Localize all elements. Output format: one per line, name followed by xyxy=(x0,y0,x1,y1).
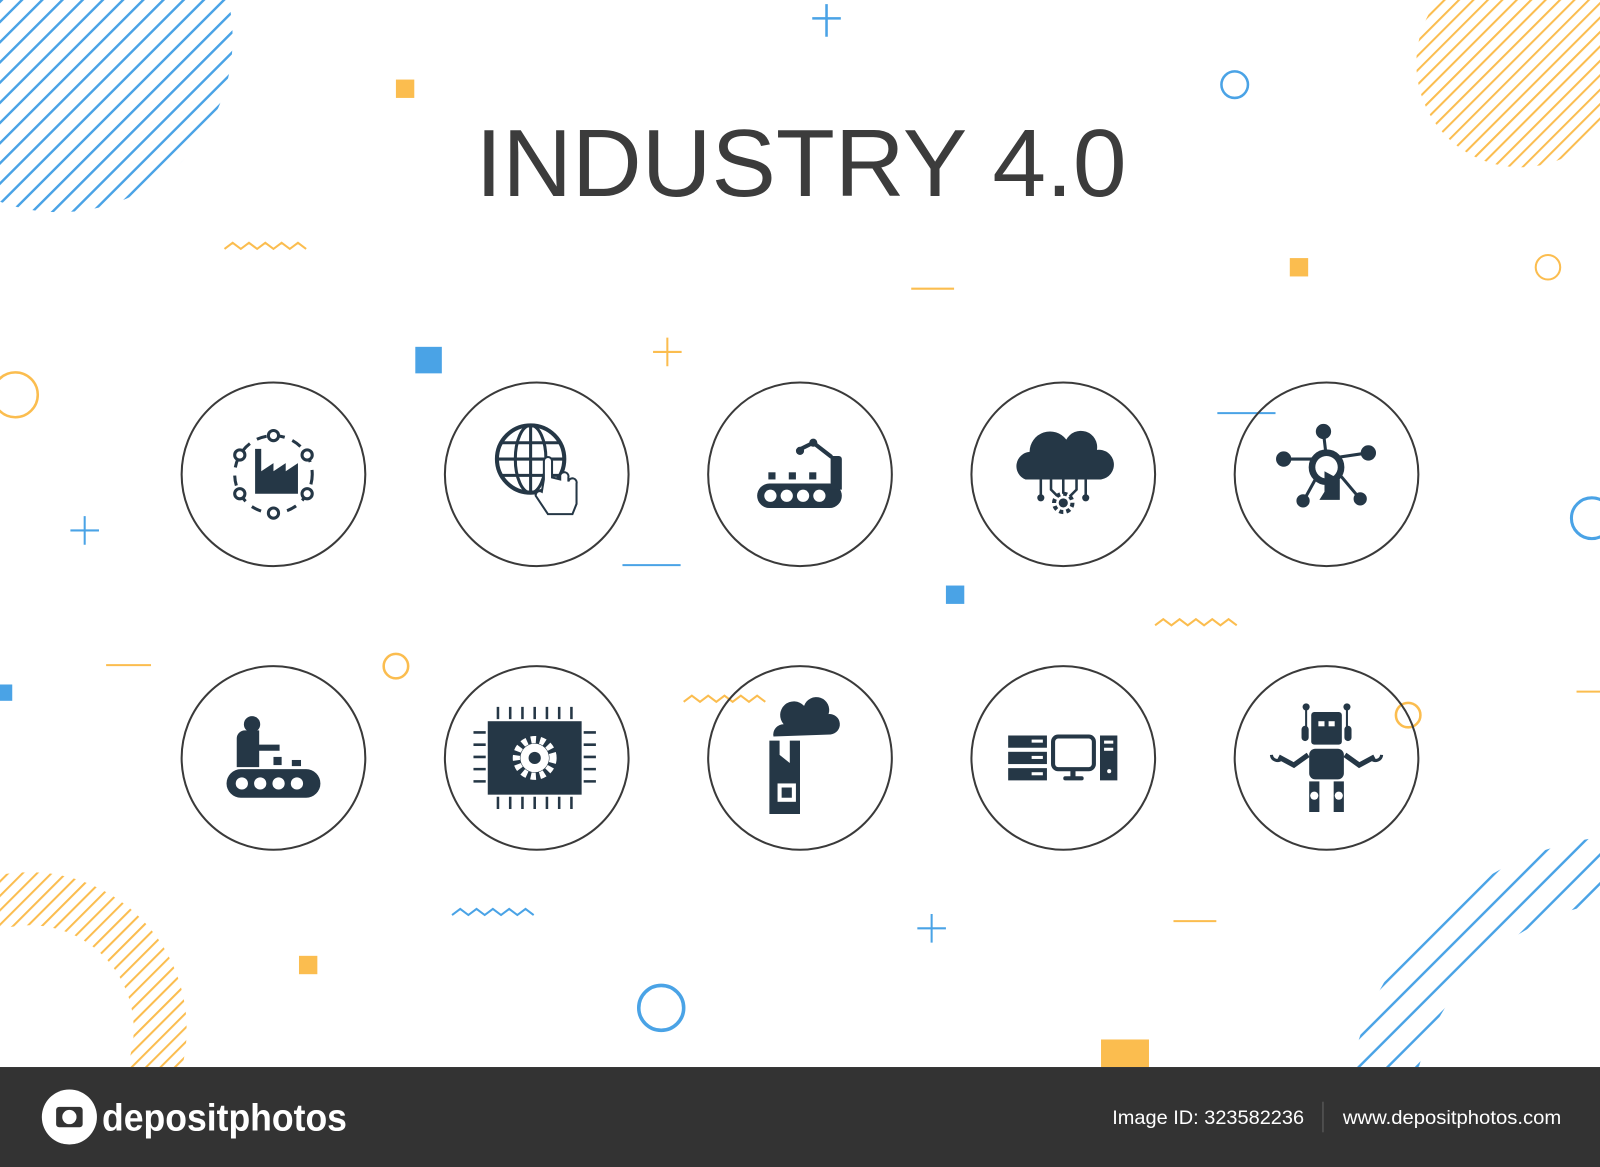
icon: smart factory network xyxy=(235,430,312,518)
icon: robot xyxy=(1271,704,1382,812)
footer image id: Image ID: 323582236 xyxy=(1112,1107,1304,1129)
footer url: www.depositphotos.com xyxy=(1342,1107,1561,1129)
icon: globe with hand xyxy=(497,425,577,514)
icon: network hand xyxy=(1277,424,1376,507)
icon: worker at conveyor xyxy=(227,716,320,798)
footer bar xyxy=(0,1067,1600,1167)
icon: cloud computing gear xyxy=(1016,431,1114,512)
icon: conveyor robot arm xyxy=(757,439,842,508)
icon: chip with gear xyxy=(473,707,596,809)
icon circles xyxy=(182,383,1418,850)
title: INDUSTRY 4.0 xyxy=(476,110,1127,217)
footer logo icon xyxy=(42,1089,97,1145)
icon: factory pollution xyxy=(769,697,840,814)
icon: servers and computer xyxy=(1008,735,1117,780)
footer logo text: depositphotos xyxy=(102,1096,347,1138)
